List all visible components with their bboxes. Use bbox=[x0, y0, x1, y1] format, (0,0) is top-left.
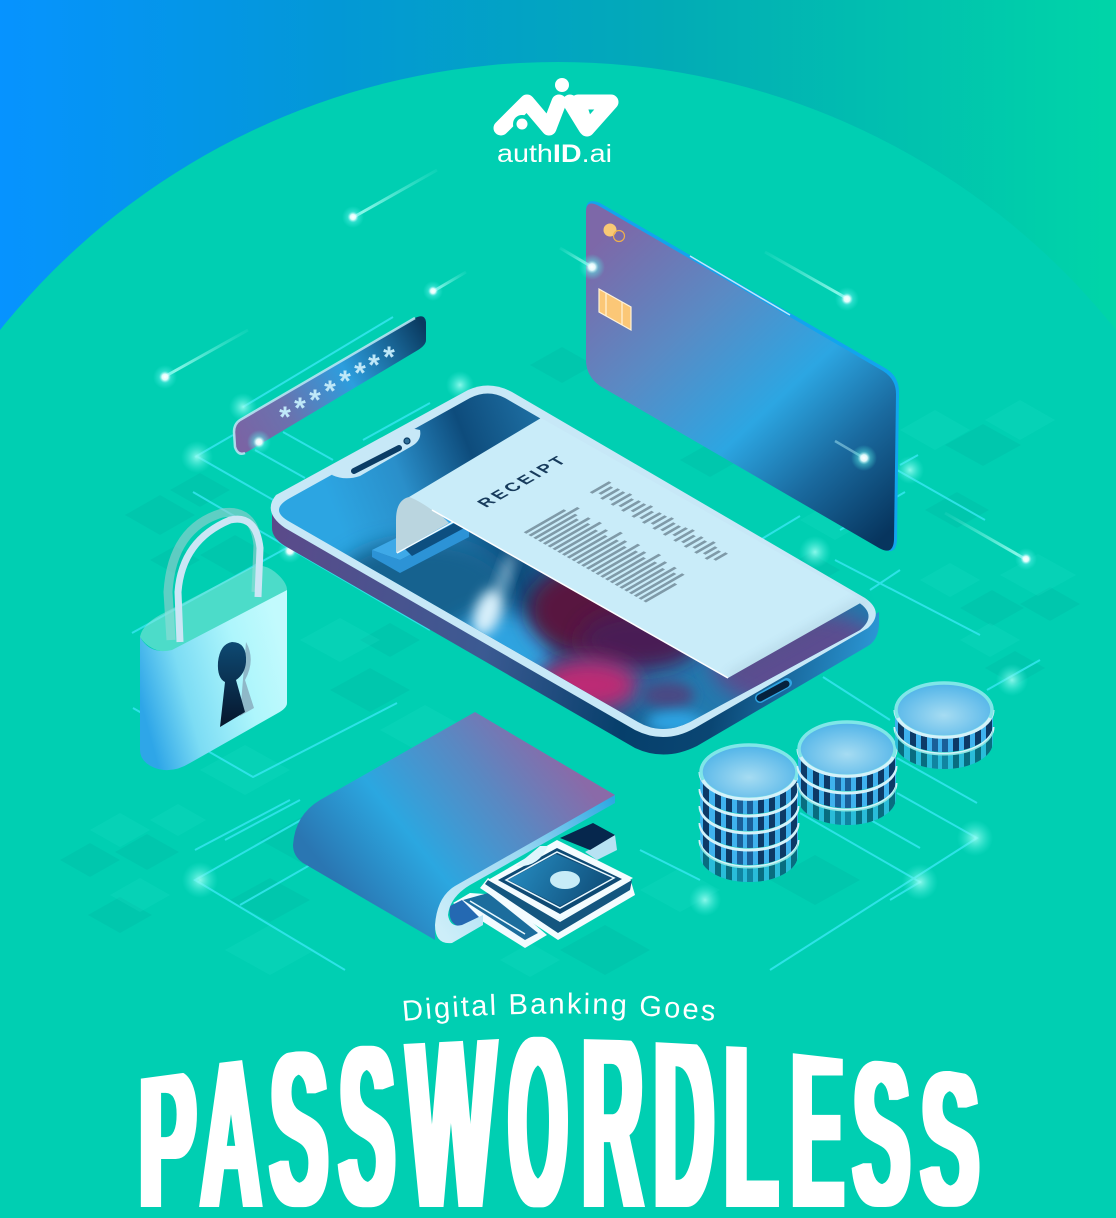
phone body bbox=[272, 510, 879, 755]
wallet cover bbox=[293, 712, 615, 940]
card streaks bbox=[560, 248, 877, 471]
field glow bbox=[247, 430, 271, 454]
circuit node glows bbox=[181, 371, 1028, 916]
receipt text bars: large block bbox=[525, 505, 693, 602]
password asterisks: * bbox=[354, 357, 366, 390]
password asterisks: * bbox=[309, 384, 321, 417]
banknote back bbox=[453, 893, 547, 948]
logo wordmark: auth ID.ai bbox=[497, 140, 612, 168]
subtitle: Digital Banking Goes bbox=[404, 992, 714, 1024]
wallet rim bbox=[435, 795, 615, 943]
lock body bbox=[140, 590, 287, 770]
phone notch bbox=[332, 428, 420, 478]
main title: PASSWORDLESS bbox=[140, 1036, 980, 1208]
coin stack large bbox=[700, 745, 798, 895]
card chip bbox=[599, 289, 631, 330]
charging port bbox=[760, 683, 787, 698]
icon: coin stacks bbox=[700, 683, 993, 895]
receipt shadow edge bbox=[728, 601, 864, 678]
icon: smartphone bbox=[260, 380, 890, 755]
password asterisks bbox=[279, 341, 395, 434]
receipt text bars: small block bbox=[591, 482, 730, 562]
icon: password field bbox=[234, 316, 426, 454]
field edge bbox=[234, 318, 415, 454]
icon: wallet with money bbox=[293, 712, 635, 948]
floor tile pattern bbox=[60, 347, 1080, 977]
logo: authID.ai bbox=[497, 78, 612, 168]
card brand mark bbox=[604, 224, 624, 242]
icon: credit card bbox=[560, 201, 899, 551]
shackle front bbox=[178, 519, 260, 642]
password asterisks: * bbox=[324, 375, 336, 408]
lock top face bbox=[140, 566, 287, 652]
phone rim bbox=[271, 385, 876, 737]
circuit lines bbox=[132, 317, 1040, 970]
shooting light streaks bbox=[153, 170, 1037, 570]
password asterisks: * bbox=[368, 349, 380, 382]
receipt curl bbox=[396, 497, 449, 553]
password asterisks: * bbox=[294, 392, 306, 425]
shackle back bbox=[168, 512, 258, 640]
card in wallet bbox=[560, 823, 617, 860]
keyhole bbox=[218, 642, 246, 727]
card edge highlight bbox=[690, 256, 790, 315]
banknote middle bbox=[480, 878, 635, 940]
coin stack medium bbox=[798, 722, 896, 838]
speaker bbox=[354, 448, 399, 471]
receipt heading: RECEIPT bbox=[473, 453, 573, 510]
password asterisks: * bbox=[383, 341, 395, 374]
coin stack small bbox=[895, 683, 993, 782]
camera bbox=[404, 438, 410, 444]
receipt paper bbox=[409, 418, 864, 678]
logo mark bbox=[501, 78, 611, 133]
phone screen bbox=[279, 394, 868, 729]
wallet inner bbox=[450, 900, 480, 927]
password asterisks: * bbox=[339, 365, 351, 398]
receipt slot bbox=[372, 508, 469, 573]
icon: padlock bbox=[140, 512, 287, 770]
password asterisks: * bbox=[279, 401, 291, 434]
keyhole shadow bbox=[240, 642, 254, 716]
banknote front bbox=[488, 840, 633, 920]
